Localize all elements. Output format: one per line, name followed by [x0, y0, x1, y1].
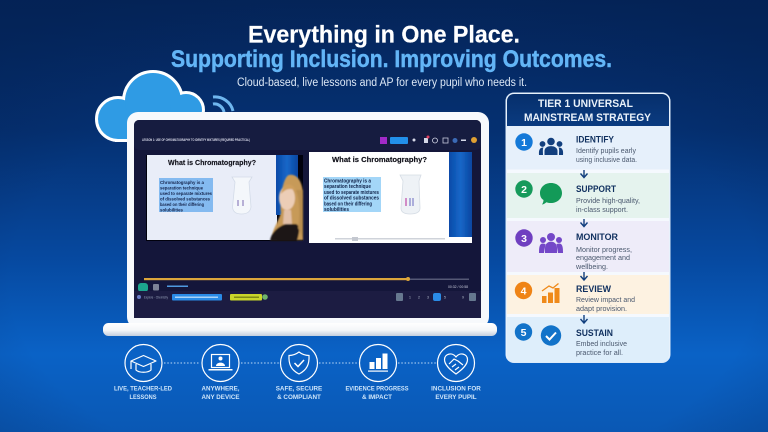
step 3: monitor: wellbeing. — [575, 264, 608, 271]
player controls — [138, 283, 188, 292]
step 5: sustain: practice for all. — [576, 350, 623, 357]
step 5: sustain — [507, 317, 669, 362]
right slide: of dissolved substances — [324, 196, 379, 202]
laptop — [103, 112, 497, 336]
left video slide: separation technique — [160, 186, 203, 192]
label — [276, 386, 322, 401]
video progress bar — [144, 277, 469, 289]
label: & COMPLIANT — [277, 394, 321, 401]
step 1: identify — [507, 126, 669, 170]
laptop lid frame — [127, 112, 489, 328]
label — [114, 386, 172, 401]
label: LIVE, TEACHER-LED — [114, 386, 172, 392]
icon: people — [539, 138, 563, 155]
icon: cloud — [98, 73, 202, 139]
icon: rising bars — [542, 284, 560, 303]
feature: live lessons — [114, 344, 172, 401]
highlighted definition — [323, 177, 381, 212]
title block — [171, 22, 612, 89]
icon: shield — [289, 352, 309, 374]
laptop screen — [134, 120, 481, 318]
icon: graduation cap — [131, 356, 156, 372]
step 4: review — [507, 275, 669, 314]
left video slide: based on their differing — [160, 202, 204, 208]
label: INCLUSION FOR — [431, 386, 481, 392]
left video slide: of dissolved substances — [160, 196, 210, 202]
panel: tier 1 strategy — [506, 93, 670, 362]
right slide: based on their differing — [324, 202, 372, 208]
icon: speech bubble — [540, 183, 562, 204]
step 2: support: SUPPORT — [576, 184, 616, 194]
label: SAFE, SECURE — [276, 386, 322, 392]
icon: check circle — [541, 325, 561, 346]
label — [431, 386, 481, 401]
right slide — [309, 152, 472, 243]
lesson navigation bar: 9 — [462, 296, 464, 300]
step 2: support: in-class support. — [576, 207, 628, 214]
icon: wifi signal — [213, 97, 233, 112]
step 3: monitor: 3 — [521, 233, 527, 245]
step 2: support: 2 — [521, 184, 527, 196]
step 4: review: adapt provision. — [576, 306, 627, 313]
step 3: monitor: MONITOR — [576, 232, 618, 242]
laptop base — [103, 323, 497, 336]
video progress bar: 00:32 / 00:58 — [448, 285, 468, 289]
lesson navigation bar — [134, 291, 481, 318]
step 4: review: REVIEW — [576, 284, 611, 294]
icon: group — [539, 233, 563, 253]
right slide: What is Chromatography? — [332, 155, 427, 164]
step 4: review: Review impact and — [576, 297, 635, 304]
label — [346, 386, 408, 401]
feature: any device — [202, 344, 240, 401]
screen top bar — [134, 120, 481, 150]
heading line 1: Everything in One Place. — [248, 22, 520, 48]
feature: evidence — [346, 344, 408, 401]
left video slide: What is Chromatography? — [168, 158, 256, 167]
lesson navigation bar: Explore · Chemistry — [144, 296, 168, 300]
lesson navigation bar: 5 — [444, 296, 446, 300]
highlighted definition — [159, 178, 213, 212]
step 3: monitor — [507, 221, 669, 272]
screen top bar: LESSON 1: USE OF CHROMATOGRAPHY TO IDENTIFY MIXTURES (REQUIRED PRACTICAL) — [142, 138, 250, 142]
label: EVERY PUPIL — [435, 394, 477, 401]
left video slide: used to separate mixtures — [160, 191, 212, 197]
arrow: monitor to review — [580, 272, 588, 280]
panel header: MAINSTREAM STRATEGY — [524, 112, 652, 124]
label: ANY DEVICE — [202, 394, 240, 401]
feature: safe and secure — [276, 344, 322, 401]
subtitle: Cloud-based, live lessons and AP for every pupil who needs it. — [237, 77, 527, 89]
label: & IMPACT — [362, 394, 392, 401]
step 1: identify: using inclusive data. — [576, 157, 637, 164]
presenter — [270, 175, 303, 241]
step 1: identify: 1 — [521, 137, 527, 149]
icon: bar chart — [368, 354, 388, 372]
step 2: support: Provide high-quality, — [576, 198, 640, 205]
step 5: sustain: SUSTAIN — [576, 328, 613, 338]
right slide: used to separate mixtures — [324, 190, 379, 196]
step 2: support — [507, 173, 669, 218]
step 3: monitor: engagement and — [576, 255, 630, 262]
lesson navigation bar: 2 — [418, 296, 420, 300]
feature: inclusion — [431, 344, 481, 401]
arrow: review to sustain — [580, 315, 588, 323]
step 5: sustain: Embed inclusive — [576, 341, 627, 348]
right slide: separation technique — [324, 184, 371, 190]
beaker — [400, 175, 421, 214]
lesson navigation bar: 3 — [427, 296, 429, 300]
arrow: support to monitor — [580, 219, 588, 226]
arrow: identify to support — [580, 170, 588, 178]
icon: laptop with pupil — [208, 354, 232, 370]
panel header — [507, 94, 669, 126]
panel card — [506, 93, 670, 362]
step 4: review: 4 — [521, 286, 527, 298]
label: ANYWHERE, — [202, 386, 240, 392]
right slide: solubilities — [324, 207, 349, 213]
step 3: monitor: Monitor progress, — [576, 247, 632, 254]
left video slide — [146, 155, 303, 241]
panel header: TIER 1 UNIVERSAL — [538, 98, 633, 110]
step 1: identify: IDENTIFY — [576, 134, 614, 144]
step 5: sustain: 5 — [521, 327, 527, 339]
left video slide: Chromatography is a — [160, 180, 204, 186]
lesson navigation bar: 1 — [409, 296, 411, 300]
icon: heart handshake — [444, 354, 468, 374]
label — [202, 386, 240, 401]
left video slide: solubilities — [160, 208, 183, 214]
label: LESSONS — [130, 394, 156, 401]
beaker — [232, 177, 252, 214]
right slide: Chromatography is a — [324, 178, 371, 184]
heading line 2: Supporting Inclusion. Improving Outcomes. — [171, 46, 612, 73]
step 1: identify: Identify pupils early — [576, 148, 636, 155]
label: EVIDENCE PROGRESS — [346, 386, 408, 392]
dotted connectors — [164, 362, 436, 364]
